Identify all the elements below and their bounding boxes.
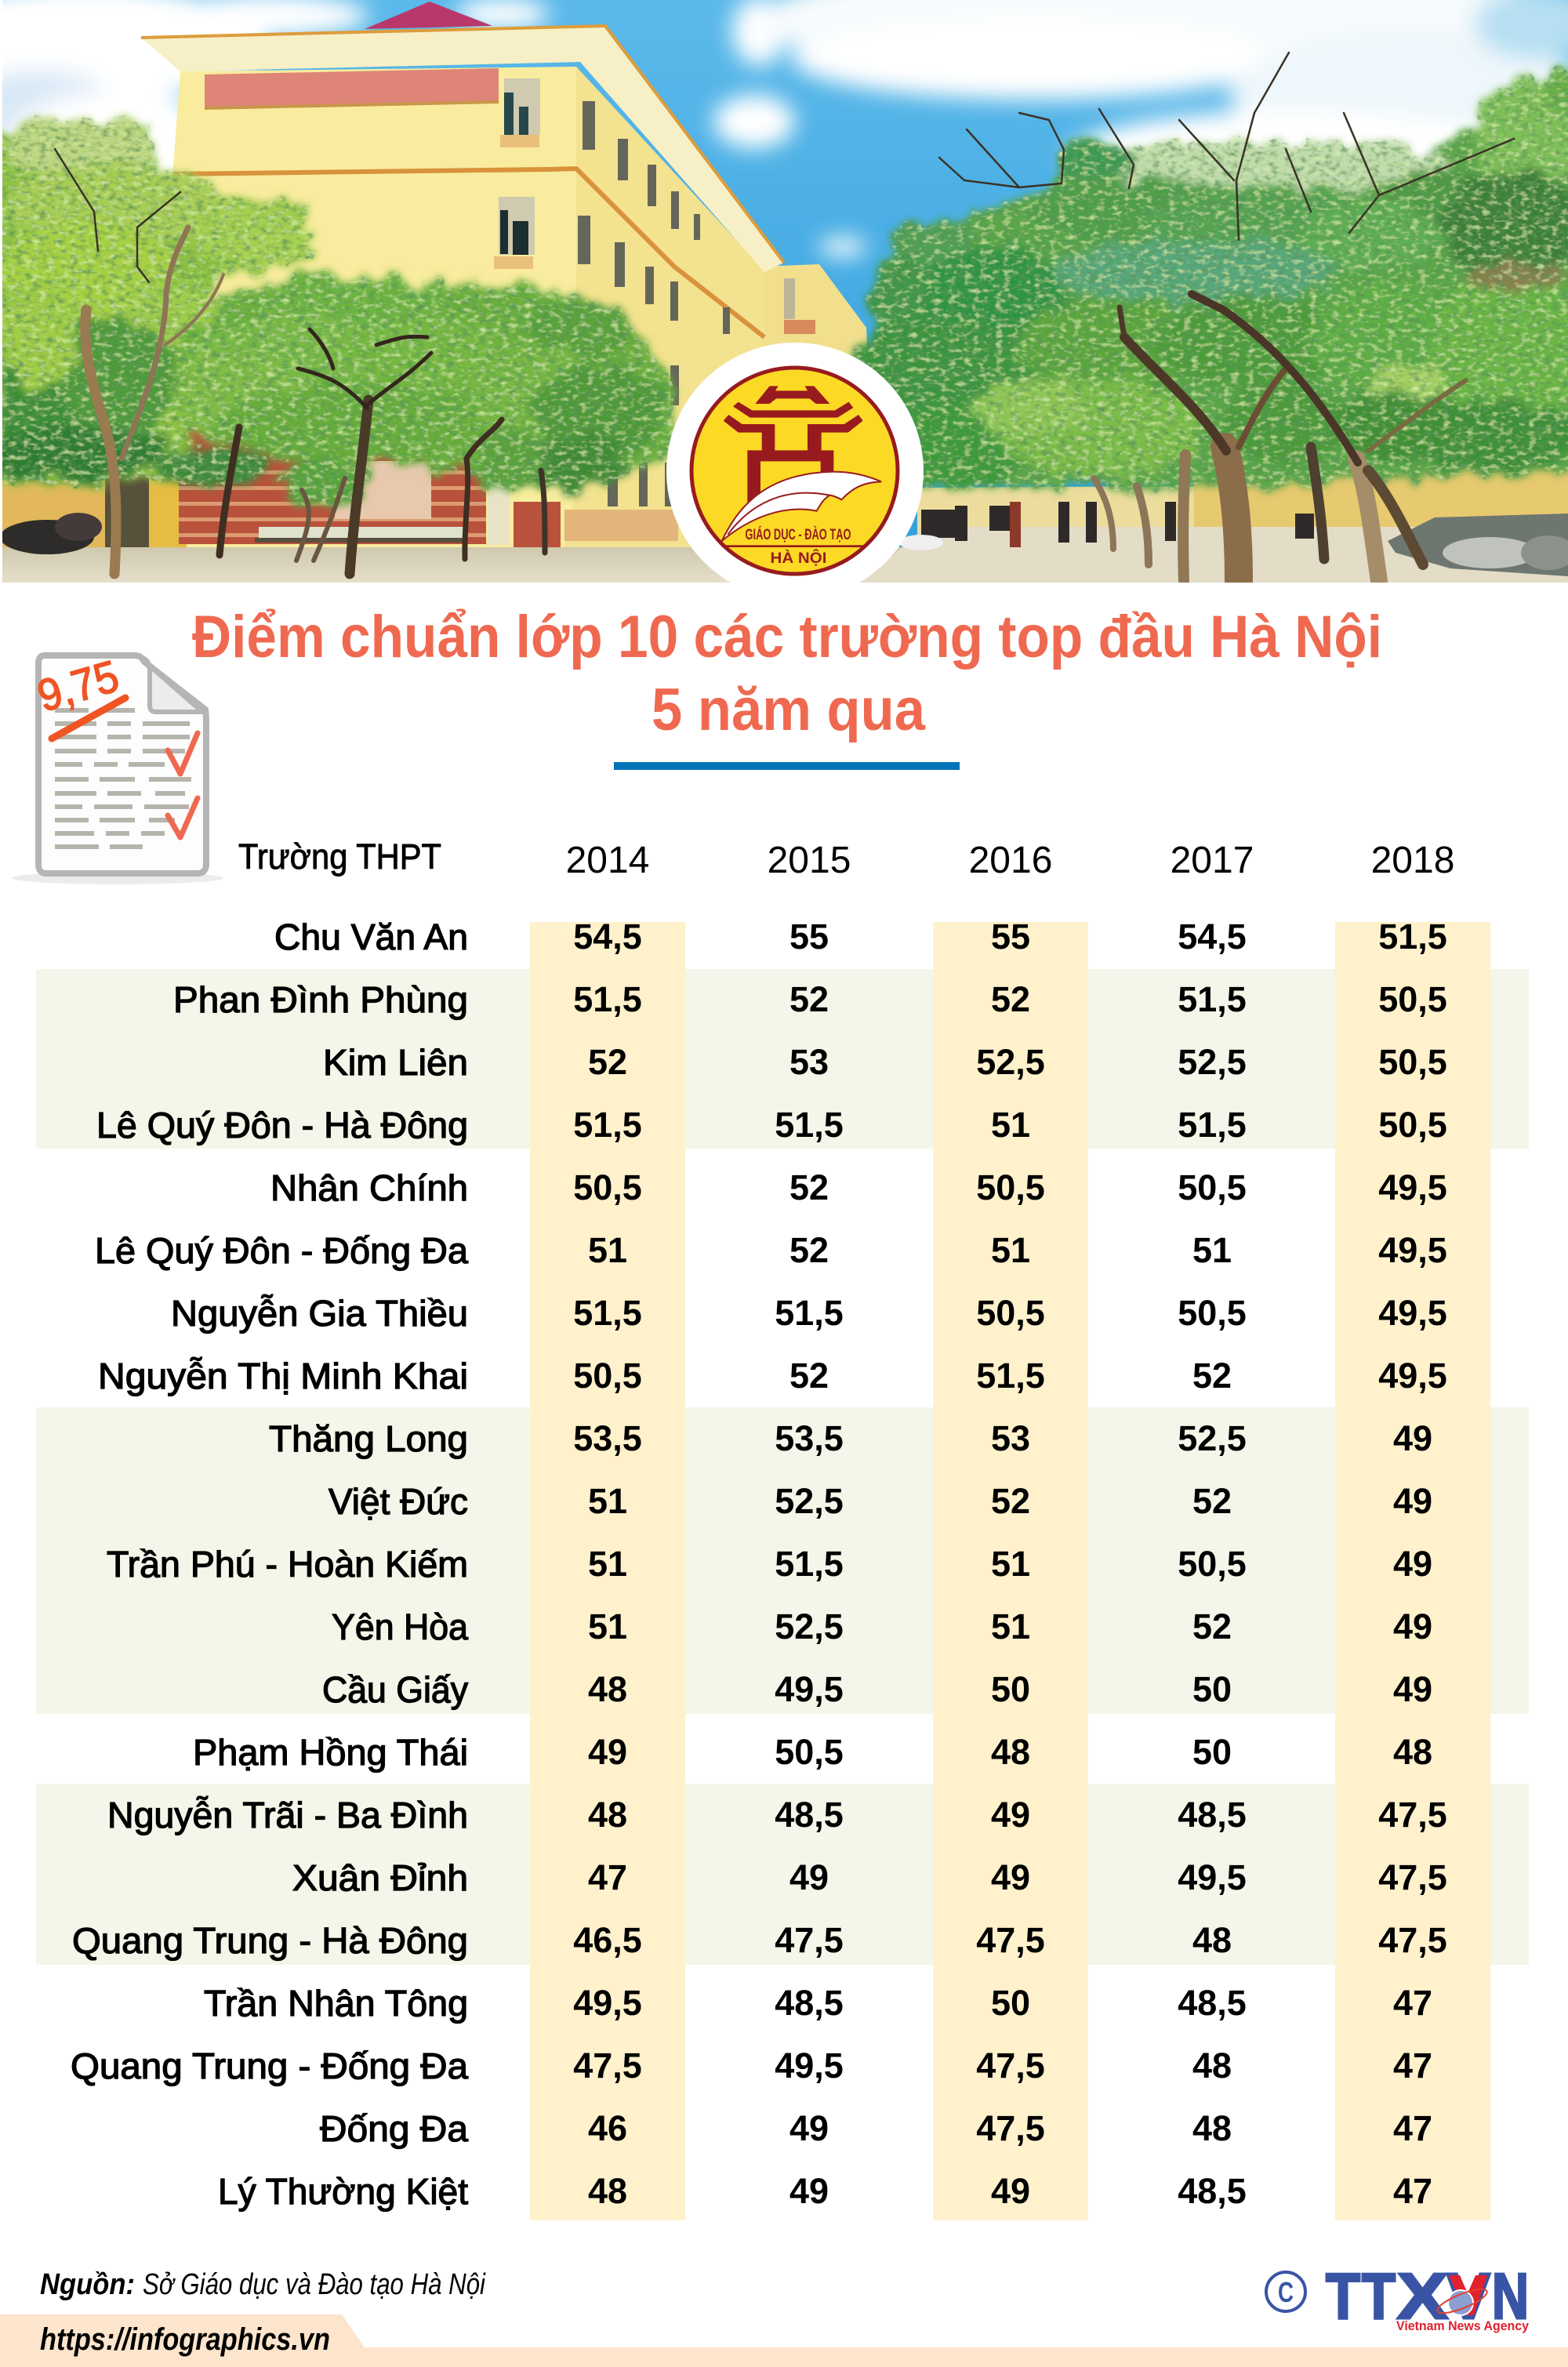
row: Kim Liên: 52 xyxy=(588,1042,627,1082)
row: Phan Đình Phùng: 51,5 xyxy=(1178,979,1247,1019)
table header: 2018 xyxy=(1371,840,1454,881)
motorbikes left xyxy=(0,513,102,554)
check marks xyxy=(168,733,198,837)
row: Việt Đức: 49 xyxy=(1393,1481,1432,1521)
row: Nguyễn Trãi - Ba Đình: 48,5 xyxy=(1178,1795,1247,1835)
row: Quang Trung - Hà Đông: 47,5 xyxy=(1378,1920,1447,1960)
row: Nhân Chính: 50,5 xyxy=(573,1167,642,1207)
row: Yên Hòa: Yên Hòa xyxy=(332,1606,468,1647)
row: Lê Quý Đôn - Đống Đa xyxy=(95,1230,1447,1271)
agency logo: T xyxy=(1362,2260,1396,2333)
row: Việt Đức: 51 xyxy=(588,1481,627,1521)
row: Lê Quý Đôn - Hà Đông: 51,5 xyxy=(1178,1105,1247,1145)
row: Phạm Hồng Thái: 48 xyxy=(991,1732,1030,1772)
row: Kim Liên xyxy=(323,1042,1447,1083)
row: Nguyễn Thị Minh Khai: 50,5 xyxy=(573,1356,642,1396)
row: Lý Thường Kiệt: 49 xyxy=(789,2171,829,2211)
title: Điểm chuẩn lớp 10 các trường top đầu Hà Nội xyxy=(192,604,1382,670)
row: Nguyễn Thị Minh Khai: 52 xyxy=(789,1356,829,1396)
row: Quang Trung - Hà Đông: 47,5 xyxy=(775,1920,844,1960)
row: Quang Trung - Hà Đông: Quang Trung - Hà Đông xyxy=(72,1920,468,1961)
row: Quang Trung - Hà Đông xyxy=(72,1920,1447,1961)
row: Cầu Giấy: 50 xyxy=(991,1669,1030,1709)
row: Lê Quý Đôn - Hà Đông: 51,5 xyxy=(775,1105,844,1145)
row: Phan Đình Phùng: 52 xyxy=(991,979,1030,1019)
footer url: https://infographics.vn xyxy=(40,2322,330,2357)
title: 5 năm qua xyxy=(652,677,926,743)
row: Kim Liên: 52,5 xyxy=(1178,1042,1247,1082)
row: Đống Đa: 47 xyxy=(1393,2108,1432,2148)
title xyxy=(192,604,1382,743)
table header xyxy=(238,837,1454,881)
row: Kim Liên: 53 xyxy=(789,1042,829,1082)
shaded gap behind left trunk xyxy=(105,463,149,550)
row: Trần Phú - Hoàn Kiếm: 49 xyxy=(1393,1544,1432,1584)
row: Quang Trung - Đống Đa xyxy=(71,2046,1432,2086)
row: Đống Đa: Đống Đa xyxy=(320,2108,468,2149)
row: Nguyễn Trãi - Ba Đình: 47,5 xyxy=(1378,1795,1447,1835)
row: Trần Phú - Hoàn Kiếm: 50,5 xyxy=(1178,1544,1247,1584)
row: Xuân Đỉnh xyxy=(292,1857,1447,1898)
badge gate emblem xyxy=(722,386,881,547)
agency logo: Vietnam News Agency xyxy=(1396,2318,1530,2333)
row: Thăng Long: 53,5 xyxy=(573,1418,642,1458)
row: Trần Nhân Tông xyxy=(204,1983,1432,2024)
row: Quang Trung - Đống Đa: 47,5 xyxy=(573,2046,642,2086)
row: Lê Quý Đôn - Đống Đa: 51 xyxy=(991,1230,1030,1270)
clouds xyxy=(0,0,1568,256)
row: Nguyễn Trãi - Ba Đình: 48,5 xyxy=(775,1795,844,1835)
row: Cầu Giấy: 48 xyxy=(588,1669,627,1709)
badge yellow disc xyxy=(691,368,898,574)
row: Lê Quý Đôn - Hà Đông: 50,5 xyxy=(1378,1105,1447,1145)
photo: school building and trees xyxy=(0,0,1568,583)
row: Thăng Long: 53 xyxy=(991,1418,1030,1458)
right boundary wall xyxy=(1194,459,1568,533)
bench xyxy=(259,527,464,539)
left boundary wall xyxy=(0,480,107,554)
source line: Nguồn: xyxy=(40,2268,135,2301)
row: Nguyễn Trãi - Ba Đình: 49 xyxy=(991,1795,1030,1835)
row: Quang Trung - Đống Đa: Quang Trung - Đống Đa xyxy=(71,2046,468,2086)
highlighted year columns xyxy=(530,922,1490,2220)
row: Thăng Long: 49 xyxy=(1393,1418,1432,1458)
row: Lê Quý Đôn - Đống Đa: 51 xyxy=(588,1230,627,1270)
row: Nguyễn Gia Thiều: 50,5 xyxy=(1178,1293,1247,1333)
source line: Sở Giáo dục và Đào tạo Hà Nội xyxy=(143,2268,486,2301)
row: Phan Đình Phùng: 52 xyxy=(789,979,829,1019)
row: Lê Quý Đôn - Đống Đa: Lê Quý Đôn - Đống Đa xyxy=(95,1230,468,1271)
row: Lý Thường Kiệt: 48 xyxy=(588,2171,627,2211)
row: Yên Hòa: 52 xyxy=(1192,1606,1232,1646)
row: Yên Hòa: 51 xyxy=(991,1606,1030,1646)
row: Lê Quý Đôn - Hà Đông: 51,5 xyxy=(573,1105,642,1145)
row: Thăng Long xyxy=(269,1418,1432,1459)
row: Quang Trung - Hà Đông: 46,5 xyxy=(573,1920,642,1960)
row: Xuân Đỉnh: Xuân Đỉnh xyxy=(292,1857,468,1898)
row: Quang Trung - Đống Đa: 47,5 xyxy=(976,2046,1045,2086)
row: Cầu Giấy: 49 xyxy=(1393,1669,1432,1709)
row: Đống Đa xyxy=(320,2108,1432,2149)
row: Nguyễn Thị Minh Khai: Nguyễn Thị Minh Khai xyxy=(98,1356,468,1396)
row: Nguyễn Gia Thiều: 51,5 xyxy=(573,1293,642,1333)
row: Nguyễn Gia Thiều: 49,5 xyxy=(1378,1293,1447,1333)
roof peak xyxy=(365,2,492,29)
row: Nguyễn Gia Thiều: 51,5 xyxy=(775,1293,844,1333)
row: Trần Nhân Tông: 47 xyxy=(1393,1983,1432,2023)
agency logo: N xyxy=(1492,2260,1529,2333)
row: Lê Quý Đôn - Đống Đa: 52 xyxy=(789,1230,829,1270)
front panel pink xyxy=(205,68,499,108)
lower balustrade xyxy=(564,510,678,541)
row: Nhân Chính: 49,5 xyxy=(1378,1167,1447,1207)
row: Trần Phú - Hoàn Kiếm: 51 xyxy=(991,1544,1030,1584)
row: Việt Đức: 52 xyxy=(1192,1481,1232,1521)
row: Yên Hòa: 51 xyxy=(588,1606,627,1646)
row: Nguyễn Gia Thiều: 50,5 xyxy=(976,1293,1045,1333)
row: Phạm Hồng Thái: 49 xyxy=(588,1732,627,1772)
row: Quang Trung - Hà Đông: 48 xyxy=(1192,1920,1232,1960)
row: Nhân Chính xyxy=(270,1167,1447,1208)
row: Cầu Giấy xyxy=(322,1669,1432,1710)
row: Chu Văn An: 54,5 xyxy=(1178,917,1247,957)
row: Nguyễn Thị Minh Khai: 52 xyxy=(1192,1356,1232,1396)
row: Việt Đức: Việt Đức xyxy=(328,1481,468,1522)
row: Trần Phú - Hoàn Kiếm: 51,5 xyxy=(775,1544,844,1584)
row: Kim Liên: 52,5 xyxy=(976,1042,1045,1082)
row: Nguyễn Thị Minh Khai xyxy=(98,1356,1447,1396)
row: Đống Đa: 46 xyxy=(588,2108,627,2148)
row: Phan Đình Phùng xyxy=(173,979,1447,1020)
row: Trần Phú - Hoàn Kiếm: Trần Phú - Hoàn Kiếm xyxy=(107,1544,468,1585)
row: Đống Đa: 47,5 xyxy=(976,2108,1045,2148)
row: Trần Nhân Tông: Trần Nhân Tông xyxy=(204,1983,468,2024)
sky xyxy=(0,0,1568,583)
footer band xyxy=(0,2314,1568,2367)
table stripes xyxy=(36,969,1529,1965)
row: Phan Đình Phùng: 50,5 xyxy=(1378,979,1447,1019)
row: Xuân Đỉnh: 49,5 xyxy=(1178,1857,1247,1897)
bare branches xyxy=(55,53,1514,282)
row: Nguyễn Thị Minh Khai: 49,5 xyxy=(1378,1356,1447,1396)
row: Xuân Đỉnh: 49 xyxy=(991,1857,1030,1897)
row: Phan Đình Phùng: 51,5 xyxy=(573,979,642,1019)
row: Quang Trung - Hà Đông: 47,5 xyxy=(976,1920,1045,1960)
building rear wing xyxy=(764,264,867,359)
row: Phạm Hồng Thái: 50 xyxy=(1192,1732,1232,1772)
row: Trần Nhân Tông: 48,5 xyxy=(775,1983,844,2023)
ground xyxy=(0,547,1568,583)
agency logo: V xyxy=(1446,2260,1490,2333)
row: Thăng Long: Thăng Long xyxy=(269,1418,468,1459)
building side wall xyxy=(564,67,764,549)
row: Trần Phú - Hoàn Kiếm: 51 xyxy=(588,1544,627,1584)
table header: 2017 xyxy=(1171,840,1254,881)
row: Xuân Đỉnh: 47,5 xyxy=(1378,1857,1447,1897)
row: Phạm Hồng Thái: Phạm Hồng Thái xyxy=(193,1732,468,1773)
row: Quang Trung - Đống Đa: 48 xyxy=(1192,2046,1232,2086)
table header: 2016 xyxy=(969,840,1052,881)
handwritten score: 9,75 xyxy=(32,651,125,721)
row: Lý Thường Kiệt: 47 xyxy=(1393,2171,1432,2211)
copyright mark xyxy=(1266,2272,1305,2311)
side windows xyxy=(578,101,730,506)
badge city: HÀ NỘI xyxy=(770,550,826,567)
row: Cầu Giấy: 49,5 xyxy=(775,1669,844,1709)
row: Lý Thường Kiệt xyxy=(218,2171,1432,2212)
row: Lê Quý Đôn - Hà Đông: Lê Quý Đôn - Hà Đông xyxy=(96,1105,468,1145)
row: Xuân Đỉnh: 47 xyxy=(588,1857,627,1897)
row: Chu Văn An: 54,5 xyxy=(573,917,642,957)
foliage xyxy=(0,69,1568,507)
row: Trần Phú - Hoàn Kiếm xyxy=(107,1544,1432,1585)
row: Yên Hòa: 49 xyxy=(1393,1606,1432,1646)
eaves xyxy=(141,26,784,272)
motorbikes right xyxy=(1388,514,1568,576)
row: Lê Quý Đôn - Đống Đa: 51 xyxy=(1192,1230,1232,1270)
row: Cầu Giấy: Cầu Giấy xyxy=(322,1669,468,1710)
row: Phạm Hồng Thái: 48 xyxy=(1393,1732,1432,1772)
row: Trần Nhân Tông: 50 xyxy=(991,1983,1030,2023)
row: Việt Đức: 52,5 xyxy=(775,1481,844,1521)
row: Yên Hòa: 52,5 xyxy=(775,1606,844,1646)
row: Lý Thường Kiệt: 49 xyxy=(991,2171,1030,2211)
row: Việt Đức xyxy=(328,1481,1432,1522)
row: Chu Văn An: 51,5 xyxy=(1378,917,1447,957)
row: Chu Văn An xyxy=(274,917,1447,957)
row: Phạm Hồng Thái: 50,5 xyxy=(775,1732,844,1772)
icon: exam paper with score xyxy=(12,651,223,884)
tree trunks xyxy=(85,227,1466,581)
row: Chu Văn An: Chu Văn An xyxy=(274,917,468,957)
row: Lý Thường Kiệt: 48,5 xyxy=(1178,2171,1247,2211)
row: Nguyễn Gia Thiều: Nguyễn Gia Thiều xyxy=(171,1293,468,1334)
yellow block lower left xyxy=(147,420,187,550)
copyright mark: C xyxy=(1278,2276,1294,2308)
row: Nhân Chính: 52 xyxy=(789,1167,829,1207)
row: Chu Văn An: 55 xyxy=(991,917,1030,957)
row: Nhân Chính: Nhân Chính xyxy=(270,1167,468,1208)
row: Trần Nhân Tông: 48,5 xyxy=(1178,1983,1247,2023)
balcony windows xyxy=(494,78,540,269)
row: Đống Đa: 49 xyxy=(789,2108,829,2148)
row: Xuân Đỉnh: 49 xyxy=(789,1857,829,1897)
row: Quang Trung - Đống Đa: 47 xyxy=(1393,2046,1432,2086)
agency logo xyxy=(1326,2260,1530,2333)
people xyxy=(899,502,1314,550)
red brick wall xyxy=(179,423,561,549)
source line xyxy=(40,2268,486,2301)
row: Nguyễn Trãi - Ba Đình: 48 xyxy=(588,1795,627,1835)
table header: 2015 xyxy=(768,840,851,881)
row: Lê Quý Đôn - Hà Đông: 51 xyxy=(991,1105,1030,1145)
row: Kim Liên: 50,5 xyxy=(1378,1042,1447,1082)
row: Trần Nhân Tông: 49,5 xyxy=(573,1983,642,2023)
row: Phạm Hồng Thái xyxy=(193,1732,1432,1773)
row: Chu Văn An: 55 xyxy=(789,917,829,957)
row: Nhân Chính: 50,5 xyxy=(976,1167,1045,1207)
agency logo: T xyxy=(1326,2260,1360,2333)
row: Cầu Giấy: 50 xyxy=(1192,1669,1232,1709)
table header: 2014 xyxy=(566,840,649,881)
title underline xyxy=(614,762,960,770)
building front wall xyxy=(145,67,576,549)
row: Nguyễn Trãi - Ba Đình: Nguyễn Trãi - Ba Đình xyxy=(107,1795,468,1835)
row: Lê Quý Đôn - Hà Đông xyxy=(96,1105,1447,1145)
row: Kim Liên: Kim Liên xyxy=(323,1042,468,1083)
row: Nhân Chính: 50,5 xyxy=(1178,1167,1247,1207)
row: Thăng Long: 53,5 xyxy=(775,1418,844,1458)
row: Phan Đình Phùng: Phan Đình Phùng xyxy=(173,979,468,1020)
table header: Trường THPT xyxy=(238,837,441,877)
agency logo: X xyxy=(1397,2260,1448,2333)
row: Việt Đức: 52 xyxy=(991,1481,1030,1521)
row: Lý Thường Kiệt: Lý Thường Kiệt xyxy=(218,2171,468,2212)
logo badge xyxy=(666,343,924,600)
building stripes xyxy=(172,169,764,337)
row: Nguyễn Trãi - Ba Đình xyxy=(107,1795,1447,1835)
row: Yên Hòa xyxy=(332,1606,1432,1647)
row: Lê Quý Đôn - Đống Đa: 49,5 xyxy=(1378,1230,1447,1270)
row: Nguyễn Thị Minh Khai: 51,5 xyxy=(976,1356,1045,1396)
row: Nguyễn Gia Thiều xyxy=(171,1293,1447,1334)
row: Quang Trung - Đống Đa: 49,5 xyxy=(775,2046,844,2086)
badge caption: GIÁO DỤC - ĐÀO TẠO xyxy=(745,526,851,543)
row: Đống Đa: 48 xyxy=(1192,2108,1232,2148)
row: Thăng Long: 52,5 xyxy=(1178,1418,1247,1458)
